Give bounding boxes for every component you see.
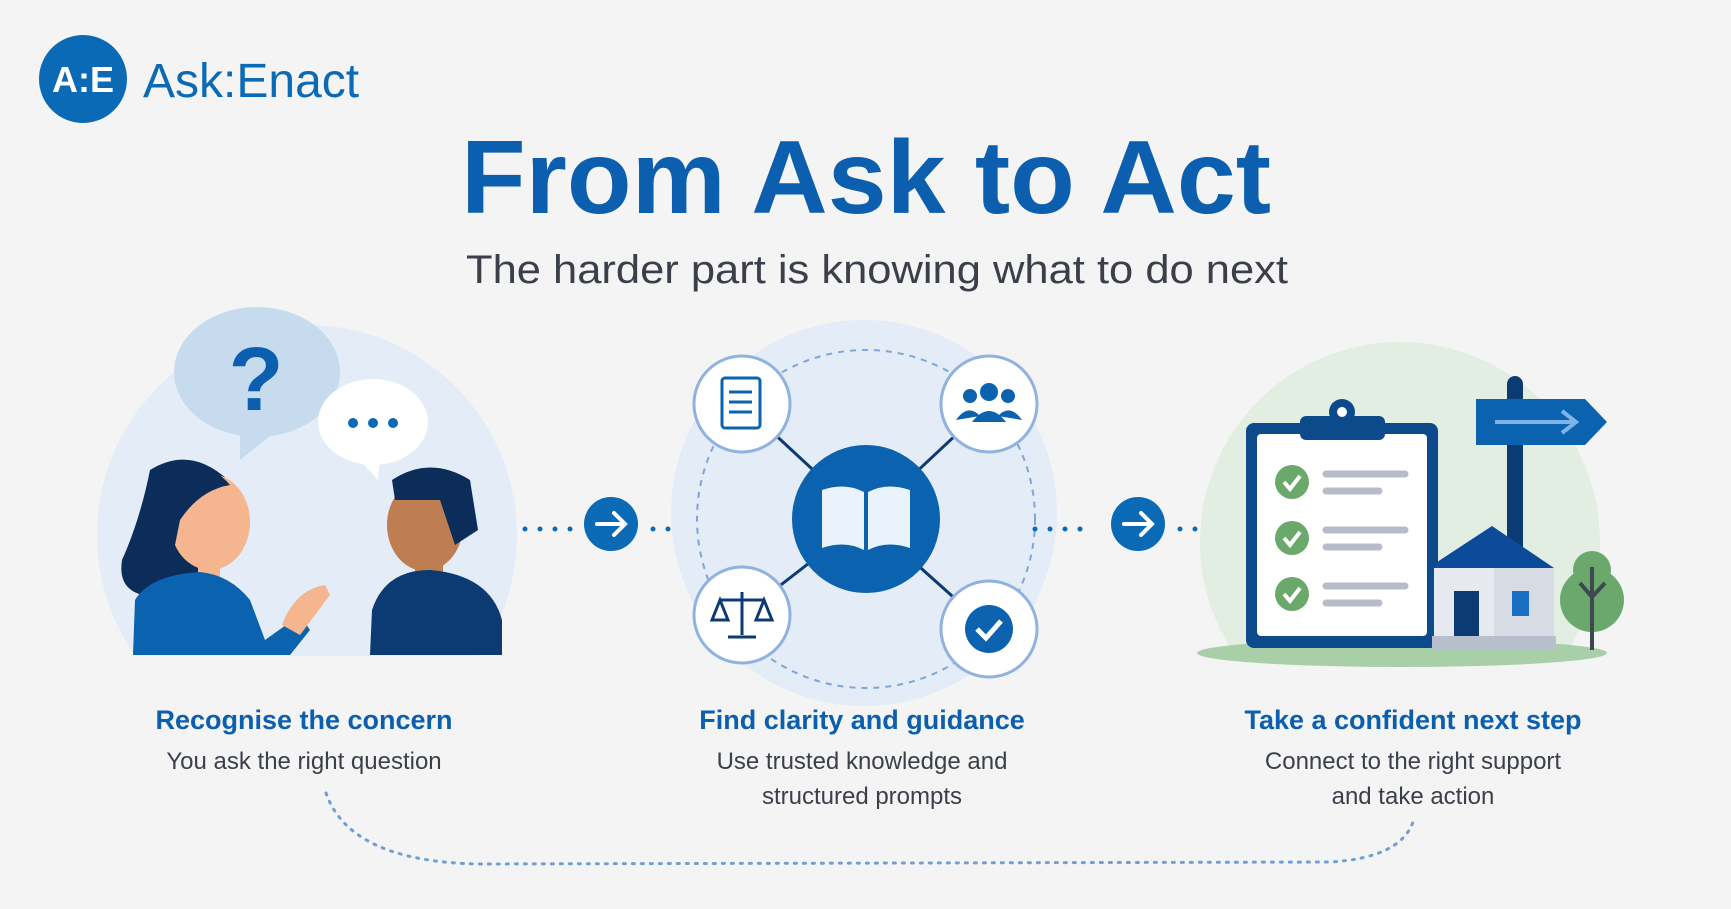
title: From Ask to Act (461, 120, 1271, 236)
icon: check (941, 581, 1037, 677)
logo: A:E (52, 59, 114, 100)
text: recognise: Recognise the concern (155, 705, 453, 735)
woman (121, 460, 330, 655)
house (1428, 526, 1556, 650)
icon: ellipsis bubble (318, 379, 428, 480)
icon: scales (694, 567, 790, 663)
icon: document (694, 356, 790, 452)
panel: next step illustration (1197, 342, 1624, 667)
clipboard (1246, 399, 1438, 648)
arrow 1 (522, 497, 700, 551)
text: next step (1244, 705, 1582, 810)
panel: recognise illustration (97, 307, 517, 656)
icon: question bubble: ? (229, 330, 283, 430)
icon: question bubble (174, 307, 340, 460)
arrow: bottom loop (326, 793, 1413, 864)
arrow 2 (1032, 497, 1228, 551)
text: next step: Take a confident next step (1244, 705, 1582, 735)
text: clarity: Use trusted knowledge and (717, 748, 1007, 775)
tree (1560, 551, 1624, 650)
icon: people (941, 356, 1037, 452)
text: next step: Connect to the right support (1265, 748, 1561, 775)
subtitle: The harder part is knowing what to do next (466, 248, 1288, 292)
text: clarity: structured prompts (762, 783, 962, 810)
panel: clarity illustration (671, 320, 1057, 706)
text: recognise: You ask the right question (166, 748, 442, 775)
logo: Ask:Enact (143, 55, 359, 108)
logo (39, 35, 359, 123)
text: next step: and take action (1332, 783, 1494, 810)
text: clarity (699, 705, 1025, 810)
icon: book (792, 445, 940, 593)
man (370, 468, 502, 655)
signpost (1476, 376, 1607, 650)
text: recognise (155, 705, 453, 775)
text: clarity: Find clarity and guidance (699, 705, 1025, 735)
